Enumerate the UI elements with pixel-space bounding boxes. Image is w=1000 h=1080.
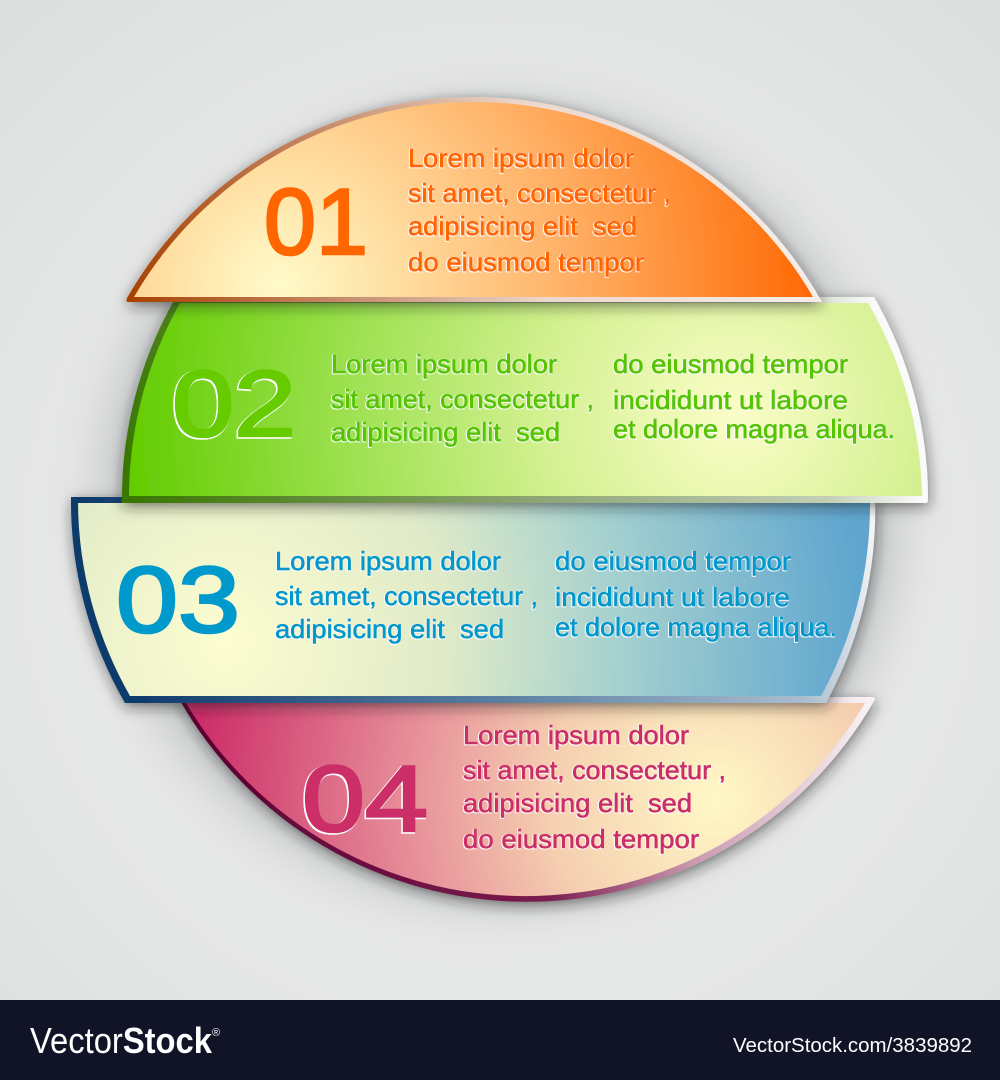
text block 04: Lorem ipsum dolor xyxy=(463,720,689,750)
panel: 02 green segment xyxy=(122,297,928,503)
panel: 04 pink segment xyxy=(178,697,875,902)
text block 04: do eiusmod tempor xyxy=(463,824,699,854)
text block 03 right: incididunt ut labore xyxy=(555,582,790,612)
footer logo: VectorStock xyxy=(30,1020,213,1061)
text block 04: sit amet, consectetur , xyxy=(463,755,726,785)
text block 01: sit amet, consectetur , xyxy=(408,178,671,208)
text block 03 right: do eiusmod tempor xyxy=(555,546,791,576)
text block 03 right: et dolore magna aliqua. xyxy=(555,612,837,642)
text block 02 left: Lorem ipsum dolor xyxy=(331,349,557,379)
text block 03 left: adipisicing elit sed xyxy=(275,614,504,644)
footer bar xyxy=(0,1000,1000,1080)
text block 03 left: Lorem ipsum dolor xyxy=(275,546,501,576)
text block 04 xyxy=(463,720,726,854)
number 01: 01 xyxy=(264,169,368,274)
footer id: VectorStock.com/3839892 xyxy=(733,1035,972,1057)
text block 01 xyxy=(408,143,671,277)
text block 02 right: do eiusmod tempor xyxy=(613,349,848,379)
text block 03 left: sit amet, consectetur , xyxy=(275,581,538,611)
panel: 01 orange segment xyxy=(126,97,822,302)
number 02: 02 xyxy=(172,351,296,456)
panel: 03 blue segment xyxy=(71,497,875,703)
text block 04: adipisicing elit sed xyxy=(463,788,692,818)
text block 02 right xyxy=(613,349,895,444)
registered mark: ® xyxy=(212,1027,220,1039)
text block 01: adipisicing elit sed xyxy=(408,211,637,241)
text block 01: do eiusmod tempor xyxy=(408,247,644,277)
number 03: 03 xyxy=(116,547,240,652)
circle soft shadow xyxy=(105,110,895,900)
text block 01: Lorem ipsum dolor xyxy=(408,143,634,173)
text block 03 right xyxy=(555,546,837,642)
text block 03 left xyxy=(275,546,538,644)
text block 02 left: adipisicing elit sed xyxy=(331,417,560,447)
text block 02 left xyxy=(331,349,594,447)
text block 02 left: sit amet, consectetur , xyxy=(331,384,594,414)
text block 02 right: et dolore magna aliqua. xyxy=(613,414,895,444)
number 04: 04 xyxy=(302,746,428,851)
text block 02 right: incididunt ut labore xyxy=(613,385,848,415)
